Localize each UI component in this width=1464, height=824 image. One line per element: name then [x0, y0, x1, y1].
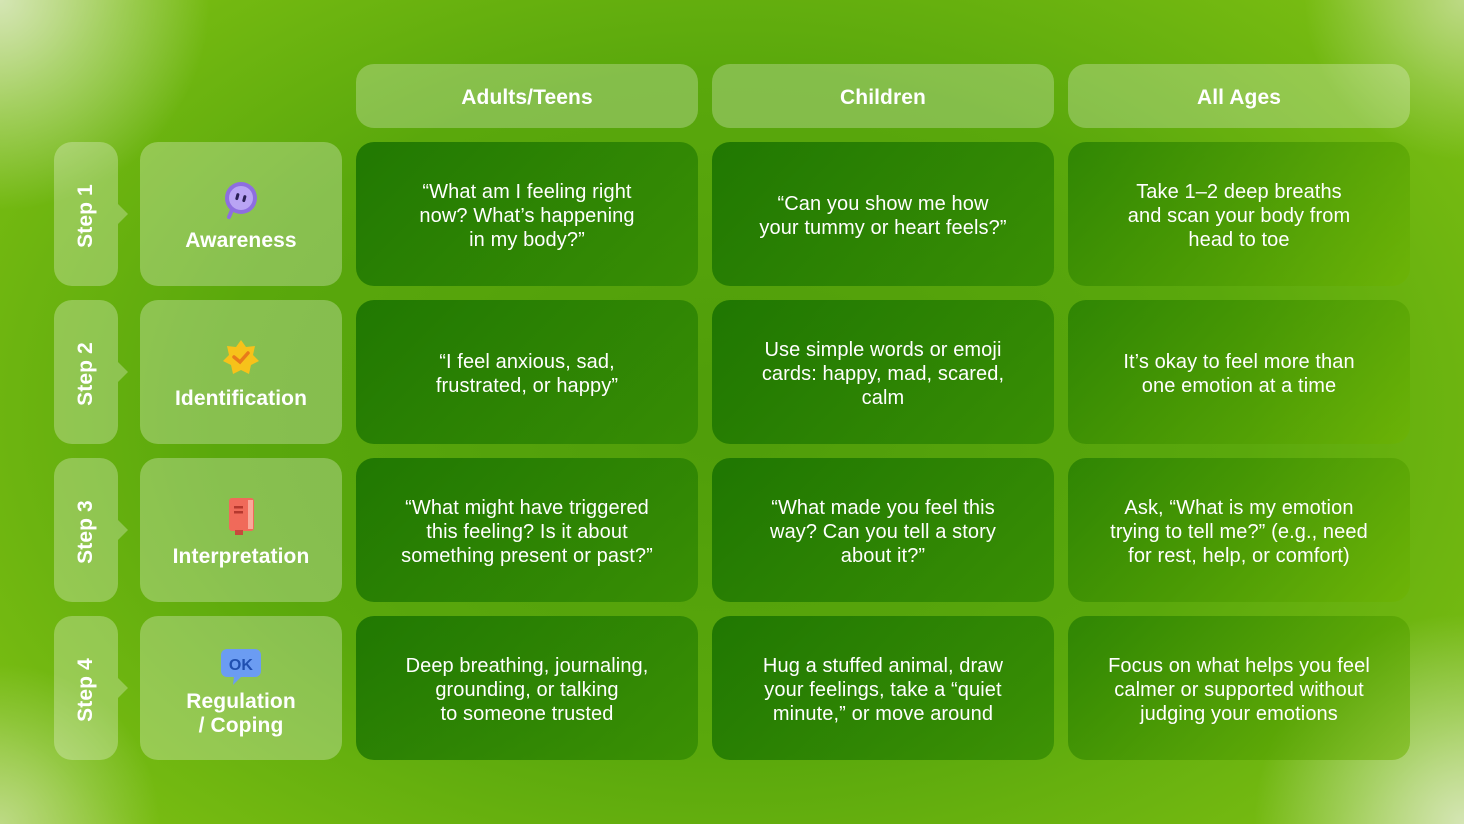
label: Interpretation	[140, 458, 342, 602]
header: All Ages	[1068, 64, 1410, 128]
cell 2-2	[712, 300, 1054, 444]
label: Identification	[140, 300, 342, 444]
cell 1-2: “Can you show me how	[778, 192, 988, 214]
cell 2-1	[356, 300, 698, 444]
cell 3-2: “What made you feel this	[771, 496, 995, 518]
label: Regulation / Coping: Regulation	[186, 690, 296, 713]
icon: purple face	[225, 182, 257, 220]
header: Children: Children	[840, 86, 926, 108]
label: Awareness	[140, 142, 342, 286]
cell 3-3: for rest, help, or comfort)	[1128, 544, 1350, 566]
cell 1-1: now? What’s happening	[419, 204, 635, 226]
cell 4-1: Deep breathing, journaling,	[406, 654, 648, 676]
icon: OK bubble: OK	[229, 657, 253, 674]
cell 1-1: “What am I feeling right	[422, 180, 632, 202]
cell 3-1: “What might have triggered	[405, 496, 649, 518]
cell 3-1	[356, 458, 698, 602]
cell 4-3	[1068, 616, 1410, 760]
cell 4-3: Focus on what helps you feel	[1108, 654, 1370, 676]
cell 2-2: calm	[862, 386, 904, 408]
step tab 4	[54, 616, 118, 760]
header: All Ages: All Ages	[1197, 86, 1281, 108]
cell 1-3: Take 1–2 deep breaths	[1136, 180, 1342, 202]
header: Adults/Teens: Adults/Teens	[461, 86, 593, 108]
step tab 3: Step 3	[74, 500, 97, 563]
header: Children	[712, 64, 1054, 128]
step tab 3	[54, 458, 118, 602]
cell 3-1: something present or past?”	[401, 544, 653, 566]
cell 4-2	[712, 616, 1054, 760]
label: Regulation / Coping: / Coping	[199, 714, 283, 737]
cell 2-3: It’s okay to feel more than	[1123, 350, 1355, 372]
cell 1-2: your tummy or heart feels?”	[759, 216, 1007, 238]
cell 2-2: cards: happy, mad, scared,	[762, 362, 1004, 384]
cell 4-3: judging your emotions	[1140, 702, 1338, 724]
step tab 4: Step 4	[74, 658, 97, 721]
cell 4-2: Hug a stuffed animal, draw	[763, 654, 1003, 676]
cell 2-1: “I feel anxious, sad,	[439, 350, 615, 372]
icon: star badge	[223, 340, 259, 374]
cell 3-2	[712, 458, 1054, 602]
cell 4-1: grounding, or talking	[435, 678, 619, 700]
cell 1-1	[356, 142, 698, 286]
cell 2-3	[1068, 300, 1410, 444]
cell 4-1: to someone trusted	[440, 702, 614, 724]
cell 4-2: minute,” or move around	[773, 702, 993, 724]
cell 2-2: Use simple words or emoji	[764, 338, 1002, 360]
step tab 1: Step 1	[74, 184, 97, 247]
cell 4-1	[356, 616, 698, 760]
step tab 2	[54, 300, 118, 444]
step tab 1	[54, 142, 118, 286]
label: Interpretation: Interpretation	[173, 544, 309, 568]
cell 1-3: and scan your body from	[1128, 204, 1350, 226]
cell 3-3: trying to tell me?” (e.g., need	[1110, 520, 1368, 542]
cell 3-3	[1068, 458, 1410, 602]
cell 1-3: head to toe	[1188, 228, 1290, 250]
cell 1-2	[712, 142, 1054, 286]
cell 1-1: in my body?”	[469, 228, 585, 250]
cell 3-3: Ask, “What is my emotion	[1124, 496, 1354, 518]
label: Awareness: Awareness	[185, 228, 297, 252]
cell 3-2: about it?”	[841, 544, 925, 566]
cell 4-3: calmer or supported without	[1114, 678, 1364, 700]
icon: red book	[229, 498, 254, 535]
label: Identification: Identification	[175, 386, 307, 410]
header: Adults/Teens	[356, 64, 698, 128]
cell 2-3: one emotion at a time	[1142, 374, 1336, 396]
step tab 2: Step 2	[74, 342, 97, 405]
cell 3-1: this feeling? Is it about	[426, 520, 628, 542]
cell 1-3	[1068, 142, 1410, 286]
icon: OK bubble	[221, 649, 261, 685]
label: Regulation / Coping	[140, 616, 342, 760]
cell 4-2: your feelings, take a “quiet	[764, 678, 1002, 700]
cell 2-1: frustrated, or happy”	[436, 374, 618, 396]
cell 3-2: way? Can you tell a story	[770, 520, 996, 542]
